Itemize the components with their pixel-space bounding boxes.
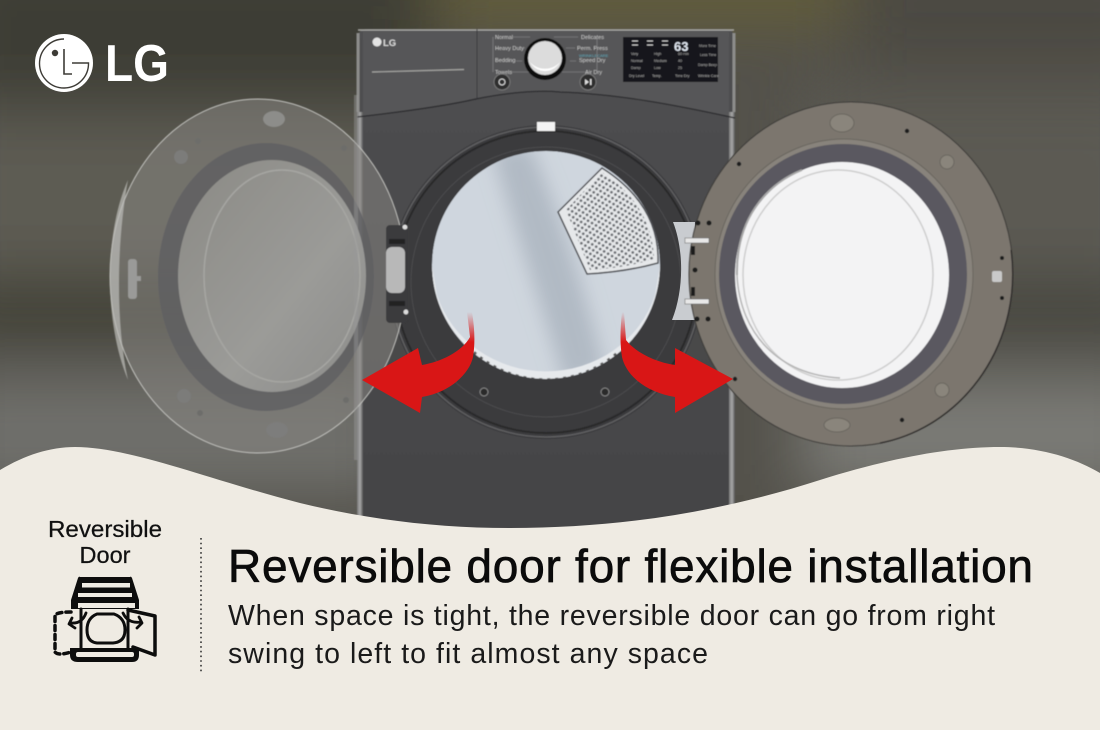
display panel: 63 [674,39,688,54]
body text [228,600,995,670]
hinge straps [685,238,709,304]
handle details [263,111,285,127]
display panel: 25 [678,66,682,70]
cycle labels [495,35,609,76]
display panel: Very [631,52,638,56]
display panel: 40 [678,59,682,63]
cycle labels: Heavy Duty [495,46,524,52]
display panel: Normal [631,59,643,63]
right door: open [685,102,1013,446]
display panel: Less Time [700,53,716,57]
display panel: Temp. [652,74,662,78]
body text: swing to left to fit almost any space [228,638,708,670]
seal [715,139,973,409]
LG mark on dryer: LG [383,38,396,49]
feature label: Reversible [48,516,162,542]
cream wave panel [0,447,1100,730]
cycle labels: Towels [495,70,512,76]
right door hinge bracket [672,222,695,320]
arrow: swing right [620,312,733,413]
left door: ghosted [110,95,409,460]
display panel: More Time [699,44,716,48]
cycle labels: WRINKLECARE [579,53,609,58]
dryer cabinet [357,29,735,535]
heading: Reversible door for flexible installation [228,540,1033,592]
door latch tab [537,122,555,131]
display panel: Damp [631,66,641,70]
glass [735,162,949,388]
icon base [70,648,139,662]
dryer [357,29,735,535]
icon: reversible door dryer [55,577,155,662]
display panel: Wrinkle Care [698,74,719,78]
lint filter [558,168,658,274]
cycle labels: Perm. Press [577,46,608,52]
LG mark on dryer [372,38,396,49]
icon top panel [71,577,139,609]
feature label: Door [80,542,131,568]
display panel: Dry Level [629,74,644,78]
logo symbol [35,34,93,92]
dotted divider [200,538,202,673]
body text: When space is tight, the reversible door can go from right [228,600,995,632]
display panel: Low [654,66,661,70]
cycle labels: Air Dry [585,70,602,76]
display panel: Medium [654,59,667,63]
cycle labels: Normal [495,35,513,41]
feature label [48,516,162,568]
display panel: High [654,52,661,56]
hinge [386,224,408,323]
door opening gasket [389,122,703,439]
drum [432,145,660,385]
display panel: Time Dry [675,74,690,78]
cycle labels: Speed Dry [579,58,606,64]
cycle labels: Bedding [495,58,516,64]
display panel [623,37,719,82]
seal [158,143,374,411]
power button [494,74,510,90]
display panel: Damp Beep [698,63,717,67]
arrow: swing left [362,312,474,413]
display panel: 60 min [678,52,689,56]
glass [178,160,366,392]
cycle labels: Delicates [581,35,604,41]
door bumps and screws [692,114,1004,432]
start button [580,74,596,90]
logo wordmark: LG [105,35,169,93]
LG logo [35,34,169,93]
control panel [357,29,735,118]
control dial [524,38,566,80]
